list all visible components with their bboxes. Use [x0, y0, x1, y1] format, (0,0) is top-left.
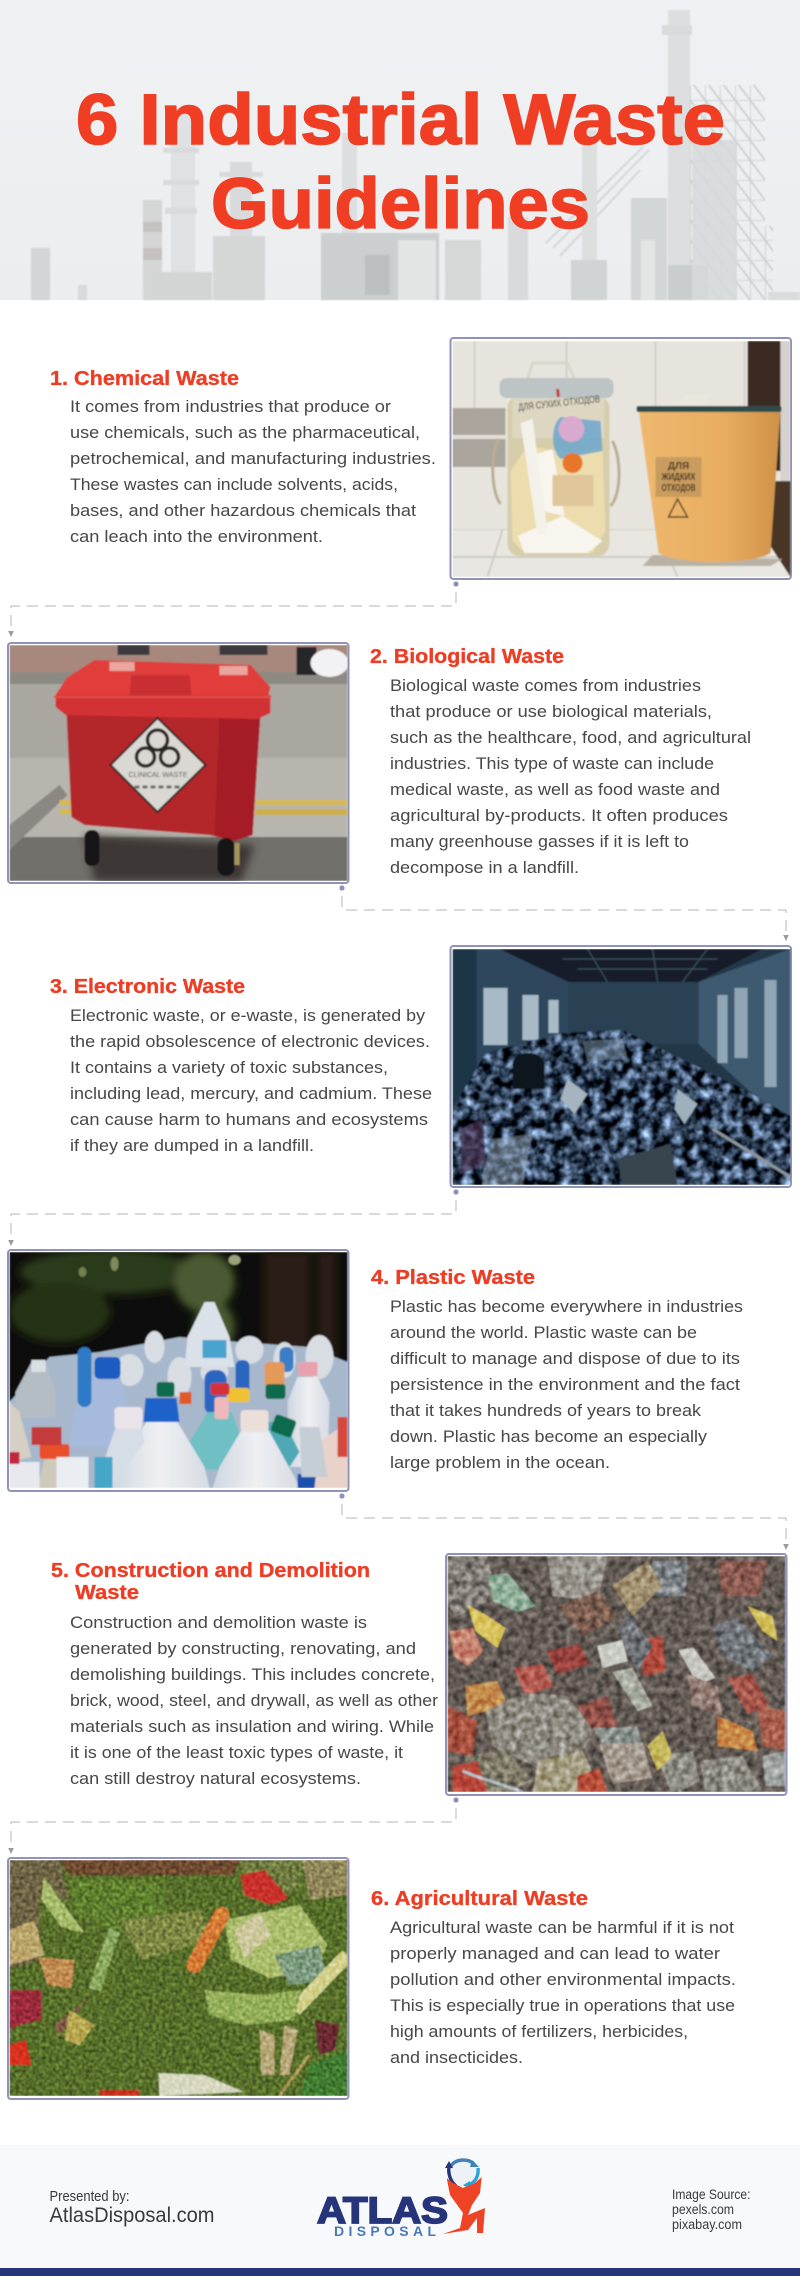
logo figure — [443, 2177, 485, 2234]
body text 2 — [390, 676, 751, 877]
footer panel — [0, 2145, 800, 2276]
section 3: electronic waste — [50, 946, 791, 1187]
bucket — [638, 409, 780, 562]
body text 5: brick, wood, steel, and drywall, as well as other — [70, 1691, 438, 1710]
photo: chemical waste jar and bucket: ЖИДКИХ — [661, 472, 696, 483]
body text 3: can cause harm to humans and ecosystems — [70, 1110, 428, 1129]
logo: Atlas Disposal — [317, 2158, 485, 2239]
presented by: AtlasDisposal.com — [50, 2204, 214, 2227]
photo: agricultural compost — [8, 1858, 348, 2099]
body text 2: Biological waste comes from industries — [390, 676, 701, 695]
body text 2: medical waste, as well as food waste and — [390, 780, 720, 799]
connector arrow 4 to 5 — [339, 1493, 789, 1550]
photo: chemical waste jar and bucket: ОТХОДОВ — [662, 483, 696, 494]
tall jug — [184, 1302, 234, 1367]
image source: pexels.com — [672, 2202, 734, 2217]
body text 1: bases, and other hazardous chemicals that — [70, 501, 416, 520]
body text 6: high amounts of fertilizers, herbicides, — [390, 2022, 688, 2041]
heading 5: Waste — [75, 1582, 139, 1604]
photo: red clinical waste bin: CLINICAL WASTE — [128, 770, 188, 779]
body text 1 — [70, 397, 436, 546]
body text 4: that it takes hundreds of years to break — [390, 1401, 702, 1420]
connector arrow 3 to 4 — [8, 1189, 459, 1246]
connector arrow 5 to 6 — [8, 1797, 459, 1854]
heading 5: 5. Construction and Demolition — [51, 1560, 370, 1582]
body text 3: the rapid obsolescence of electronic devices. — [70, 1032, 430, 1051]
body text 6: pollution and other environmental impacts. — [390, 1970, 736, 1989]
body text 3: including lead, mercury, and cadmium. These — [70, 1084, 432, 1103]
image source: Image Source: — [672, 2187, 750, 2202]
body text 2: decompose in a landfill. — [390, 858, 579, 877]
section 6: agricultural waste — [8, 1858, 736, 2099]
body text 2: that produce or use biological materials, — [390, 702, 712, 721]
body text 3: if they are dumped in a landfill. — [70, 1136, 314, 1155]
body text 2: such as the healthcare, food, and agricultural — [390, 728, 751, 747]
heading 2: 2. Biological Waste — [370, 646, 564, 668]
body text 4: down. Plastic has become an especially — [390, 1427, 708, 1446]
right bottle — [288, 1377, 330, 1467]
body text 3 — [70, 1006, 432, 1155]
heading 6: 6. Agricultural Waste — [371, 1888, 588, 1910]
photo: red clinical waste bin — [8, 643, 348, 883]
body text 1: It comes from industries that produce or — [70, 397, 391, 416]
photo: chemical waste jar and bucket: ДЛЯ СУХИХ ОТХОДОВ — [518, 394, 601, 414]
grey bottle left — [16, 1362, 56, 1417]
photo: chemical waste jar and bucket — [450, 338, 791, 579]
connector arrow 2 to 3 — [339, 885, 789, 941]
body text 2: many greenhouse gasses if it is left to — [390, 832, 689, 851]
header panel — [0, 0, 800, 300]
photo: chemical waste jar and bucket: ДЛЯ — [668, 461, 689, 472]
section 2: biological waste — [8, 643, 751, 883]
connector arrow 1 to 2 — [8, 581, 459, 637]
presented by — [50, 2189, 214, 2227]
image source — [672, 2187, 750, 2232]
body text 6: This is especially true in operations that use — [390, 1996, 735, 2015]
body text 2: industries. This type of waste can include — [390, 754, 714, 773]
body text 4: around the world. Plastic waste can be — [390, 1323, 697, 1342]
image source: pixabay.com — [672, 2217, 742, 2232]
body text 4: persistence in the environment and the fact — [390, 1375, 740, 1394]
section 1: chemical waste — [50, 338, 791, 579]
heading 4: 4. Plastic Waste — [371, 1267, 535, 1289]
body text 4: difficult to manage and dispose of due to its — [390, 1349, 740, 1368]
photo: construction rubble — [446, 1554, 786, 1796]
body text 5: Construction and demolition waste is — [70, 1613, 367, 1632]
title: 6 Industrial Waste — [76, 81, 725, 160]
body text 6 — [390, 1918, 736, 2067]
body text 5: demolishing buildings. This includes concrete, — [70, 1665, 435, 1684]
body text 1: use chemicals, such as the pharmaceutical, — [70, 423, 420, 442]
photo: plastic bottles — [8, 1250, 348, 1491]
body text 4: Plastic has become everywhere in industries — [390, 1297, 743, 1316]
body text 6: Agricultural waste can be harmful if it is not — [390, 1918, 734, 1937]
presented by: Presented by: — [50, 2189, 130, 2205]
footer bar — [0, 2268, 800, 2276]
jar — [508, 396, 610, 556]
body text 4: large problem in the ocean. — [390, 1453, 610, 1472]
body text 2: agricultural by-products. It often produces — [390, 806, 728, 825]
body text 4 — [390, 1297, 743, 1472]
heading 5 — [51, 1560, 370, 1604]
big white bottles — [110, 1417, 210, 1488]
logo subtitle: DISPOSAL — [334, 2223, 436, 2239]
body text 3: Electronic waste, or e-waste, is generated by — [70, 1006, 426, 1025]
body text 5: generated by constructing, renovating, and — [70, 1639, 416, 1658]
body text 6: and insecticides. — [390, 2048, 523, 2067]
title — [76, 81, 725, 244]
heading 1: 1. Chemical Waste — [50, 368, 239, 390]
logo wordmark: ATLAS — [317, 2190, 448, 2231]
photo: electronic waste pile in dark room — [450, 946, 791, 1187]
body text 6: properly managed and can lead to water — [390, 1944, 720, 1963]
body text 5: materials such as insulation and wiring. While — [70, 1717, 434, 1736]
section 4: plastic waste — [8, 1250, 743, 1491]
heading 3: 3. Electronic Waste — [50, 976, 245, 998]
body text 5 — [70, 1613, 438, 1788]
body text 1: can leach into the environment. — [70, 527, 323, 546]
teal bottle — [190, 1412, 244, 1470]
section 5: construction and demolition waste — [51, 1554, 786, 1796]
title: Guidelines — [211, 165, 590, 244]
refinery silhouette — [31, 10, 800, 300]
logo globe arrows — [445, 2158, 479, 2189]
body text 5: it is one of the least toxic types of waste, it — [70, 1743, 403, 1762]
body text 5: can still destroy natural ecosystems. — [70, 1769, 361, 1788]
blue bottle — [70, 1377, 130, 1447]
body text 3: It contains a variety of toxic substances, — [70, 1058, 388, 1077]
body text 1: petrochemical, and manufacturing industries. — [70, 449, 436, 468]
body text 1: These wastes can include solvents, acids, — [70, 475, 398, 494]
